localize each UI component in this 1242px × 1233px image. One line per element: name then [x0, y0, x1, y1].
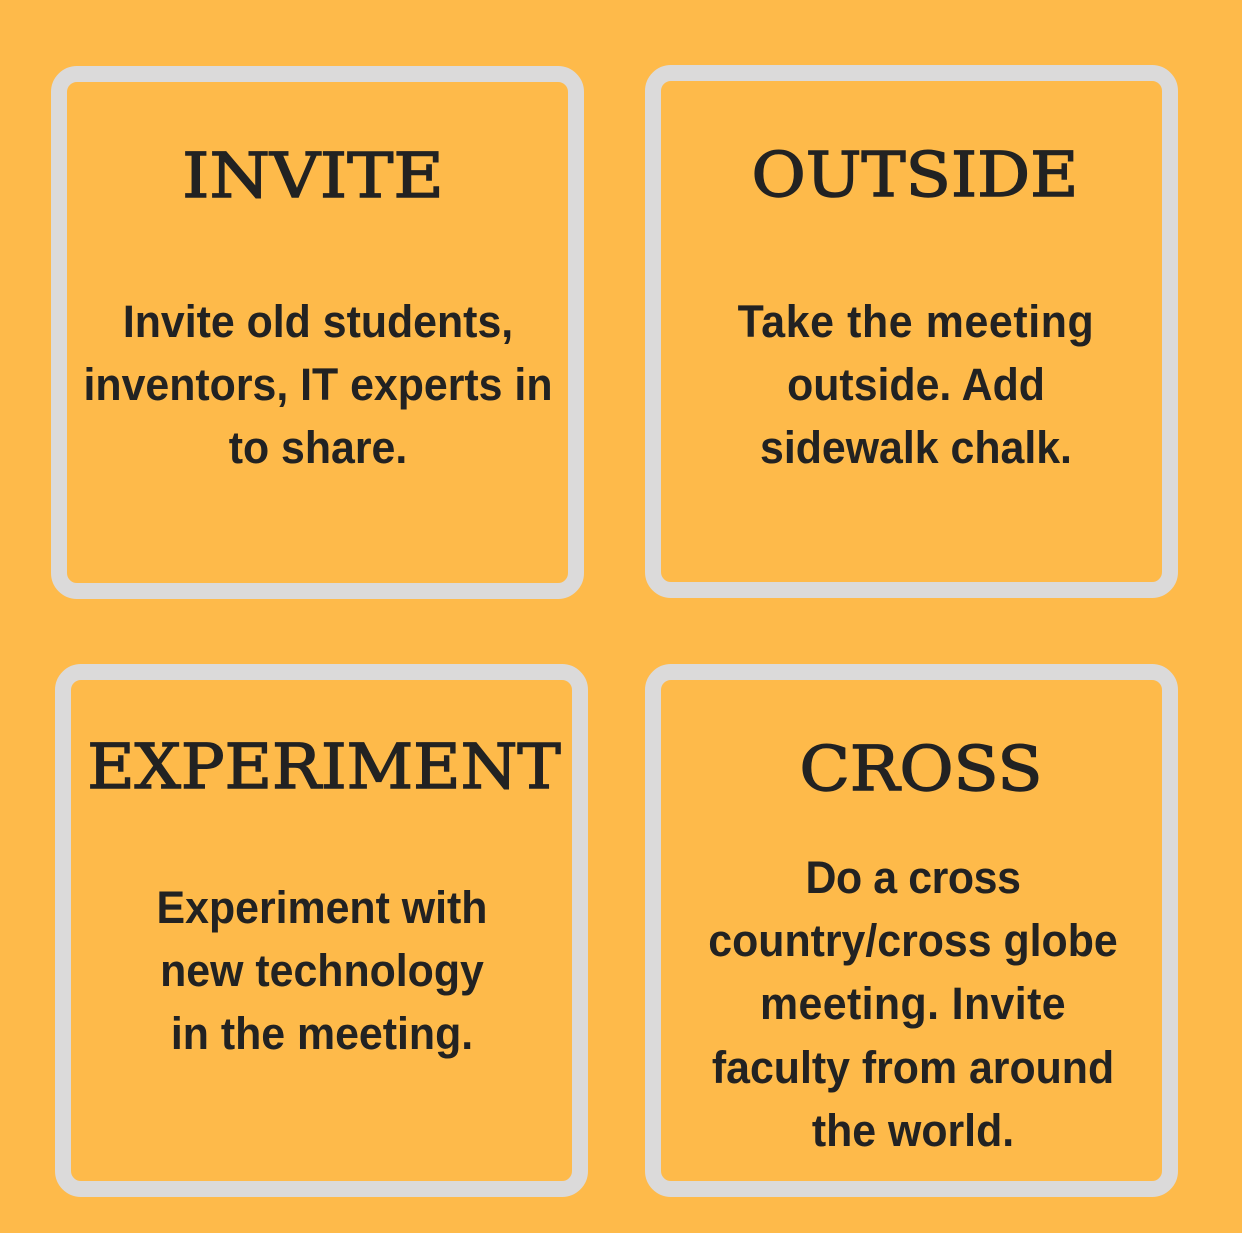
text: experiment: new technology	[160, 945, 484, 996]
text: invite: inventors, IT experts in	[84, 359, 552, 410]
text: experiment: in the meeting.	[171, 1008, 473, 1059]
text: cross: faculty from around	[712, 1042, 1114, 1093]
text: experiment: Experiment with	[157, 882, 487, 932]
text: outside: sidewalk chalk.	[760, 422, 1071, 473]
panel: experiment	[55, 664, 588, 1197]
text: outside: Take the meeting	[737, 296, 1094, 347]
text: experiment	[157, 882, 487, 1059]
text: cross: country/cross globe	[708, 915, 1118, 966]
text: invite	[84, 296, 552, 473]
heading: invite: INVITE	[182, 140, 443, 212]
panel: invite	[51, 66, 584, 599]
panel: outside	[645, 65, 1178, 598]
text: outside	[737, 296, 1094, 473]
text: cross: the world.	[812, 1105, 1014, 1156]
text: outside: outside. Add	[787, 359, 1044, 410]
text: cross: Do a cross	[805, 852, 1021, 903]
heading: experiment: EXPERIMENT	[87, 731, 560, 803]
text: cross: meeting. Invite	[760, 978, 1066, 1029]
text: cross	[708, 852, 1118, 1156]
text: invite: to share.	[229, 422, 407, 473]
panel: cross	[645, 664, 1178, 1197]
text: invite: Invite old students,	[123, 296, 513, 347]
heading: cross: CROSS	[799, 733, 1042, 805]
heading: outside: OUTSIDE	[751, 139, 1078, 211]
